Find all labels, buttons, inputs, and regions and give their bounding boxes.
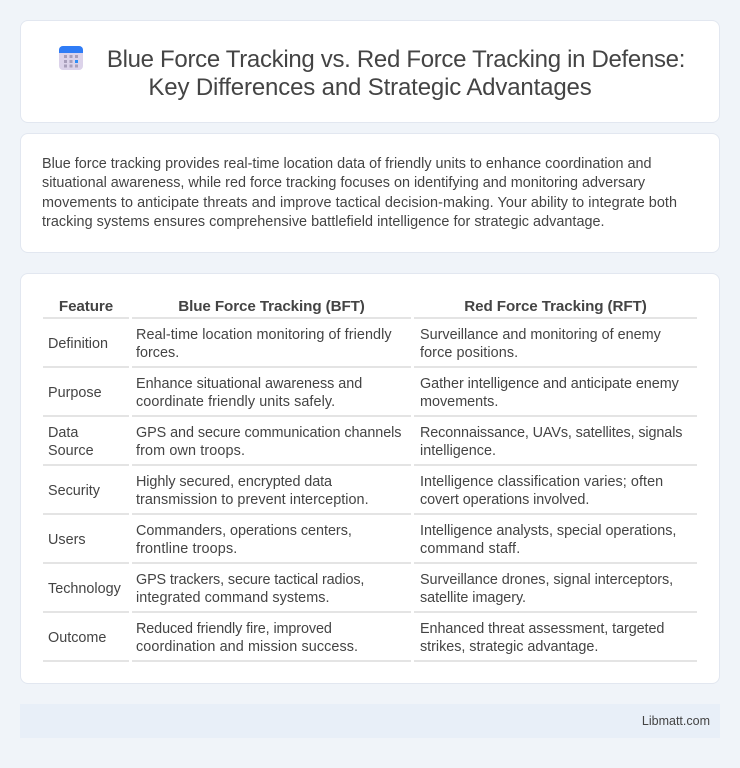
table rows: Outcome [48, 630, 106, 646]
table rows: force positions. [420, 345, 518, 361]
table rows: movements. [420, 394, 498, 410]
table rows: coordinate friendly units safely. [136, 394, 335, 410]
table rows: Enhanced threat assessment, targeted [420, 621, 664, 637]
table rows: Data [48, 425, 78, 441]
table rows: GPS and secure communication channels [136, 425, 401, 441]
table rows: Reduced friendly fire, improved [136, 621, 332, 637]
table rows: command staff. [420, 541, 520, 557]
table rows: from own troops. [136, 443, 245, 459]
table rows: integrated command systems. [136, 590, 330, 606]
table rows: Commanders, operations centers, [136, 523, 352, 539]
title card [20, 20, 720, 123]
table rows: Users [48, 532, 86, 548]
table header: Feature [59, 298, 113, 315]
table rows: covert operations involved. [420, 492, 589, 508]
table rows: Gather intelligence and anticipate enemy [420, 376, 679, 392]
summary text: situational awareness, while red force tracking focuses on identifying and monitoring adversary [42, 175, 645, 191]
table rows: transmission to prevent interception. [136, 492, 369, 508]
summary text [42, 156, 677, 230]
table rows: intelligence. [420, 443, 496, 459]
table header: Red Force Tracking (RFT) [464, 298, 647, 315]
table rows: Definition [48, 336, 108, 352]
title [107, 46, 685, 101]
title: Blue Force Tracking vs. Red Force Tracking in Defense: [107, 46, 685, 73]
summary text: movements to anticipate threats and improve tactical decision-making. Your ability to integrate both [42, 195, 677, 211]
table rows: forces. [136, 345, 179, 361]
table header: Blue Force Tracking (BFT) [178, 298, 365, 315]
table rows: coordination and mission success. [136, 639, 358, 655]
table rows: Highly secured, encrypted data [136, 474, 332, 490]
footer credit: Libmatt.com [642, 714, 710, 728]
table rows: Real-time location monitoring of friendly [136, 327, 392, 343]
table rows: Reconnaissance, UAVs, satellites, signals [420, 425, 682, 441]
table rows: satellite imagery. [420, 590, 526, 606]
table rows: Intelligence analysts, special operations, [420, 523, 676, 539]
table rows: strikes, strategic advantage. [420, 639, 598, 655]
summary text: Blue force tracking provides real-time location data of friendly units to enhance coordination and [42, 156, 652, 172]
table rows: Security [48, 483, 100, 499]
table rows: Source [48, 443, 94, 459]
table rows: frontline troops. [136, 541, 237, 557]
icon: calendar [59, 46, 83, 70]
title: Key Differences and Strategic Advantages [148, 74, 592, 101]
table header [59, 298, 647, 315]
footer bar [20, 704, 720, 738]
summary text: tracking systems ensures comprehensive battlefield intelligence for strategic advantage. [42, 214, 605, 230]
table rows: Enhance situational awareness and [136, 376, 362, 392]
table rows: Technology [48, 581, 121, 597]
table rows [43, 317, 697, 662]
table rows: GPS trackers, secure tactical radios, [136, 572, 364, 588]
table rows: Intelligence classification varies; often [420, 474, 663, 490]
summary card [20, 133, 720, 253]
table rows: Surveillance and monitoring of enemy [420, 327, 661, 343]
comparison table card [20, 273, 720, 684]
table rows: Purpose [48, 385, 102, 401]
table rows: Surveillance drones, signal interceptors, [420, 572, 673, 588]
